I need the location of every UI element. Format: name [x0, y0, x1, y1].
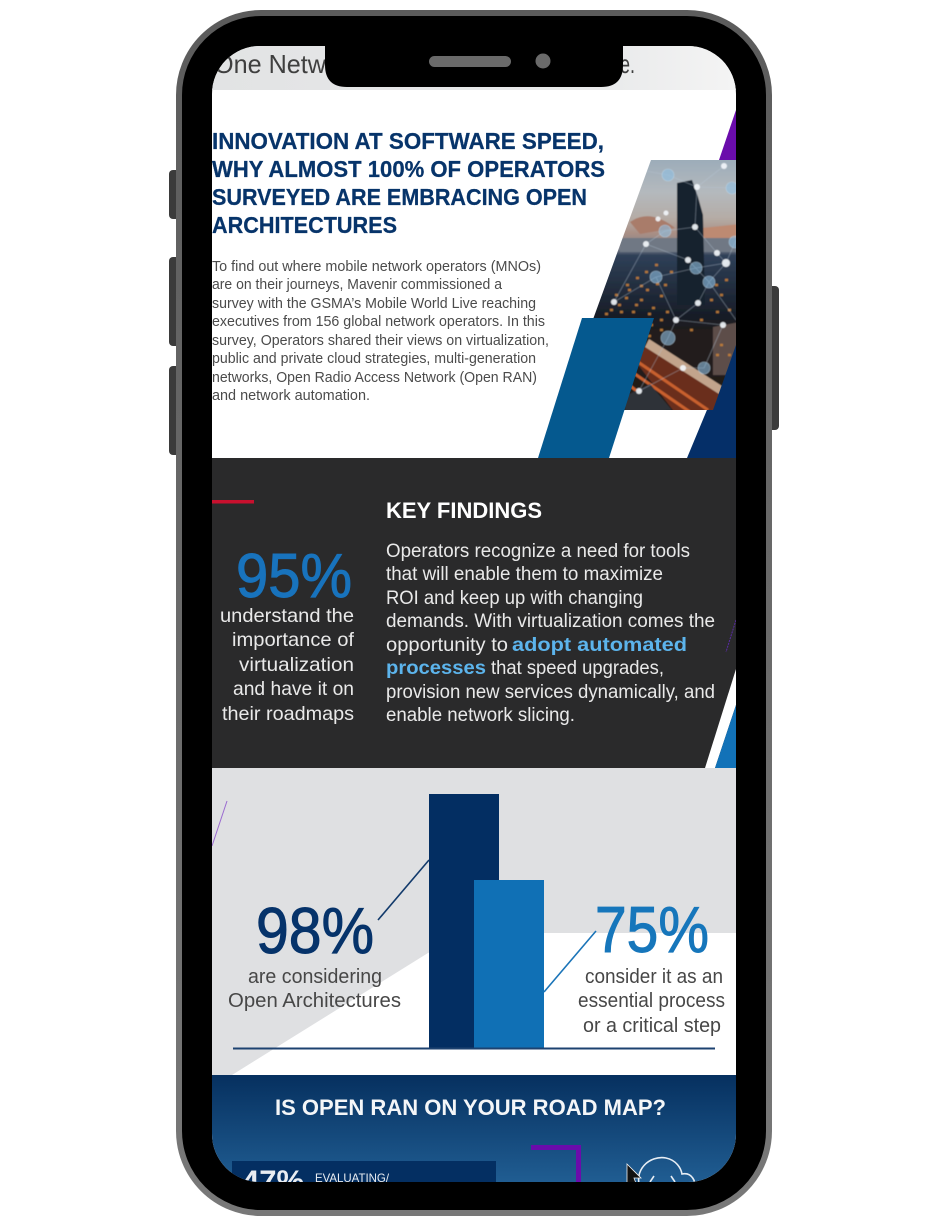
stat description: importance of	[232, 629, 355, 651]
phone side buttons	[169, 170, 779, 455]
top strip	[212, 46, 736, 90]
stat box: 47% evaluating: EVALUATING/	[315, 1171, 390, 1185]
key findings text: that speed upgrades,	[491, 658, 664, 679]
phone screen	[212, 46, 741, 1198]
red accent line	[212, 500, 254, 504]
leader line: 75%	[544, 931, 596, 992]
key findings text: that will enable them to maximize	[386, 564, 663, 585]
intro paragraph: To find out where mobile network operators (MNOs)	[212, 259, 541, 275]
key findings text: demands. With virtualization comes the	[386, 611, 715, 632]
panel: key findings	[212, 458, 736, 768]
heading: SURVEYED ARE EMBRACING OPEN	[212, 184, 587, 210]
top strip: One Netw	[214, 49, 326, 79]
key findings text: Operators recognize a need for tools	[386, 541, 690, 562]
phone notch	[325, 46, 623, 87]
key findings text: adopt automated	[512, 635, 687, 656]
stat box: 47% evaluating	[232, 1161, 496, 1182]
phone body	[179, 13, 769, 1213]
purple dashed accent	[726, 620, 736, 652]
stat description: 98%: Open Architectures	[228, 989, 401, 1012]
intro paragraph	[212, 259, 549, 404]
blue slant	[538, 318, 654, 458]
key findings text: processes	[386, 658, 486, 679]
stat description: 75%	[578, 965, 725, 1037]
heading	[212, 128, 605, 238]
corner white stripe	[705, 669, 736, 768]
stat description: and have it on	[233, 678, 354, 700]
stat description: 75%: or a critical step	[583, 1014, 721, 1037]
stat: 95%: 95%	[236, 542, 352, 611]
intro paragraph: survey with the GSMA’s Mobile World Live reaching	[212, 296, 536, 312]
key findings text: provision new services dynamically, and	[386, 682, 715, 703]
stat box: 47% evaluating: 47%	[242, 1165, 304, 1198]
icon: cursor	[627, 1164, 641, 1186]
stat description	[220, 605, 355, 725]
stat description: 75%: essential process	[578, 989, 725, 1012]
stat: 98%: 98%	[256, 894, 374, 967]
road map heading: IS OPEN RAN ON YOUR ROAD MAP?	[275, 1095, 666, 1120]
notch speaker	[429, 56, 511, 67]
heading: INNOVATION AT SOFTWARE SPEED,	[212, 128, 604, 154]
stat description: virtualization	[239, 654, 354, 676]
navy slant	[687, 340, 736, 458]
corner blue shape	[715, 705, 736, 768]
stat description: understand the	[220, 605, 354, 627]
leader line: 98%	[378, 860, 429, 920]
intro paragraph: networks, Open Radio Access Network (Open RAN)	[212, 370, 537, 386]
stat description: 98%	[228, 965, 401, 1012]
stat description: 75%: consider it as an	[585, 965, 723, 988]
intro paragraph: and network automation.	[212, 388, 370, 404]
intro paragraph: are on their journeys, Mavenir commissioned a	[212, 277, 503, 293]
key findings heading: KEY FINDINGS	[386, 498, 542, 523]
bar chart	[233, 794, 715, 1048]
heading: WHY ALMOST 100% OF OPERATORS	[212, 156, 605, 182]
key findings text: enable network slicing.	[386, 705, 575, 726]
purple accent	[719, 110, 736, 160]
intro paragraph: survey, Operators shared their views on virtualization,	[212, 333, 549, 349]
notch camera	[536, 54, 550, 68]
panel: road map	[212, 1075, 736, 1182]
stat: 75%: 75%	[595, 893, 709, 966]
intro graphic: angled shapes and city photo	[538, 110, 741, 458]
key findings text: ROI and keep up with changing	[386, 588, 643, 609]
stat description: their roadmaps	[222, 703, 354, 725]
intro paragraph: public and private cloud strategies, multi-generation	[212, 351, 536, 367]
icon: cloud	[638, 1156, 696, 1182]
purple bracket	[531, 1148, 578, 1190]
top strip: e.	[620, 49, 635, 79]
city network photo	[594, 160, 736, 410]
key findings text	[386, 541, 715, 726]
key findings text: opportunity to	[386, 635, 508, 656]
stat description: 98%: are considering	[248, 965, 382, 988]
purple accent line	[212, 801, 227, 846]
heading: ARCHITECTURES	[212, 212, 397, 238]
panel: open architectures chart	[212, 768, 736, 1075]
intro paragraph: executives from 156 global network operators. In this	[212, 314, 545, 330]
